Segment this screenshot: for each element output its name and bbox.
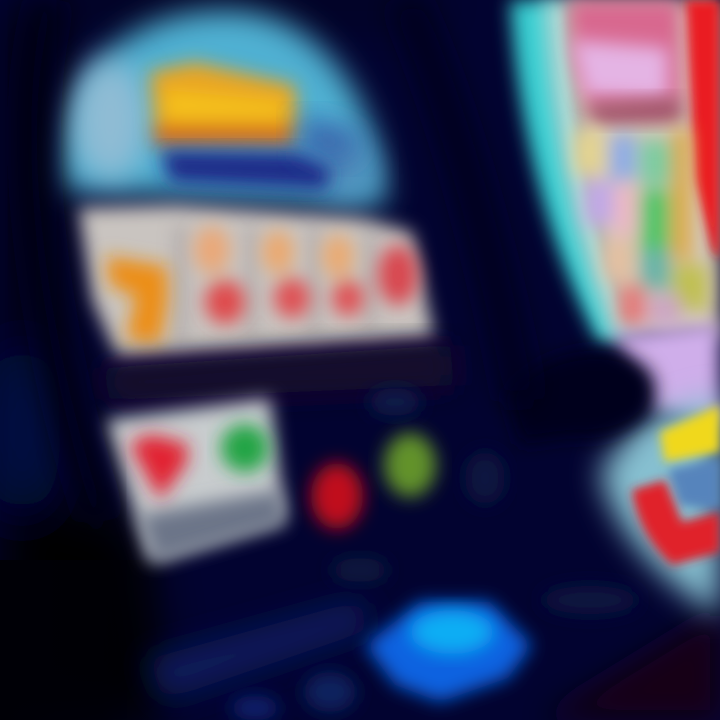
red stripe — [632, 480, 720, 565]
yellow stripe — [660, 405, 720, 462]
panel: reels — [78, 205, 434, 358]
panel: console blue strip — [145, 600, 370, 700]
reel separators — [176, 225, 374, 345]
button: small dark blue — [369, 388, 421, 416]
icon: green symbol — [221, 424, 269, 472]
arm: dark lever knob — [505, 350, 655, 445]
panel: cyan side strip — [510, 0, 625, 345]
cabinet: dark arch edge — [405, 0, 520, 400]
panel: right game screen — [565, 0, 720, 335]
panel: dark divider below reels — [100, 345, 455, 400]
logo: blue band — [160, 150, 332, 190]
panel: top arch display — [62, 10, 386, 205]
button: green — [384, 433, 436, 497]
button: glowing blue — [365, 602, 532, 702]
icon: red heart — [130, 435, 188, 500]
panel: lower paytable — [105, 398, 285, 562]
red side strip — [685, 0, 720, 260]
cabinet: left arch edge — [34, 0, 100, 520]
reel symbol: orange seven — [106, 256, 168, 344]
logo: yellow marquee — [150, 62, 298, 146]
panel: right lower machine — [600, 395, 720, 615]
colourful grid — [575, 130, 707, 325]
button: dark navy small — [465, 452, 505, 504]
button: muted label — [332, 558, 388, 582]
right dark maroon base — [540, 610, 720, 720]
pink banner — [570, 0, 682, 110]
buttons: bottom small — [231, 586, 638, 720]
blue stripe — [668, 458, 720, 510]
button: red — [311, 463, 363, 529]
cabinet bottom-left corner — [0, 560, 170, 720]
cabinet left shadow — [0, 0, 440, 720]
panel: lavender lower screen — [612, 322, 720, 425]
reel symbols: peach and red — [194, 226, 418, 324]
